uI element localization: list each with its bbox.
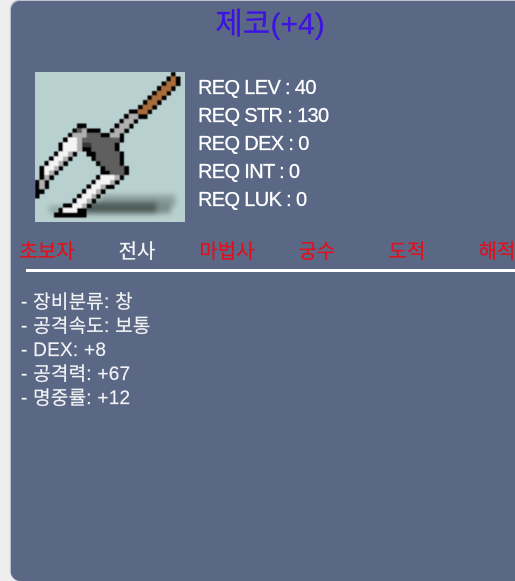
item attribute list: - DEX: +8 — [21, 340, 106, 361]
job: thief: 도적 — [389, 241, 425, 263]
stats: requirements — [198, 77, 328, 211]
job: beginner: 초보자 — [19, 241, 75, 263]
job: magician: 마법사 — [199, 241, 255, 263]
job: archer: 궁수 — [299, 241, 335, 263]
stats: requirements: REQ INT : 0 — [198, 161, 299, 183]
stats: requirements: REQ LUK : 0 — [198, 189, 306, 211]
item attribute list: - 공격속도: 보통 — [21, 316, 151, 337]
ground shadow — [49, 195, 176, 214]
stats: requirements: REQ STR : 130 — [198, 105, 328, 127]
item attribute list: - 공격력: +67 — [21, 364, 130, 385]
item attribute list — [21, 292, 151, 409]
job: pirate: 해적 — [479, 241, 515, 263]
item attribute list: - 명중률: +12 — [21, 388, 130, 409]
stats: requirements: REQ LEV : 40 — [198, 77, 316, 99]
divider line — [26, 269, 515, 272]
item attribute list: - 장비분류: 창 — [21, 292, 133, 312]
trident pixels — [35, 74, 180, 215]
stats: requirements: REQ DEX : 0 — [198, 133, 309, 155]
job: warrior: 전사 — [119, 241, 155, 263]
title: 제코(+4) — [215, 8, 325, 41]
icon: pixel-art trident weapon — [35, 72, 185, 222]
